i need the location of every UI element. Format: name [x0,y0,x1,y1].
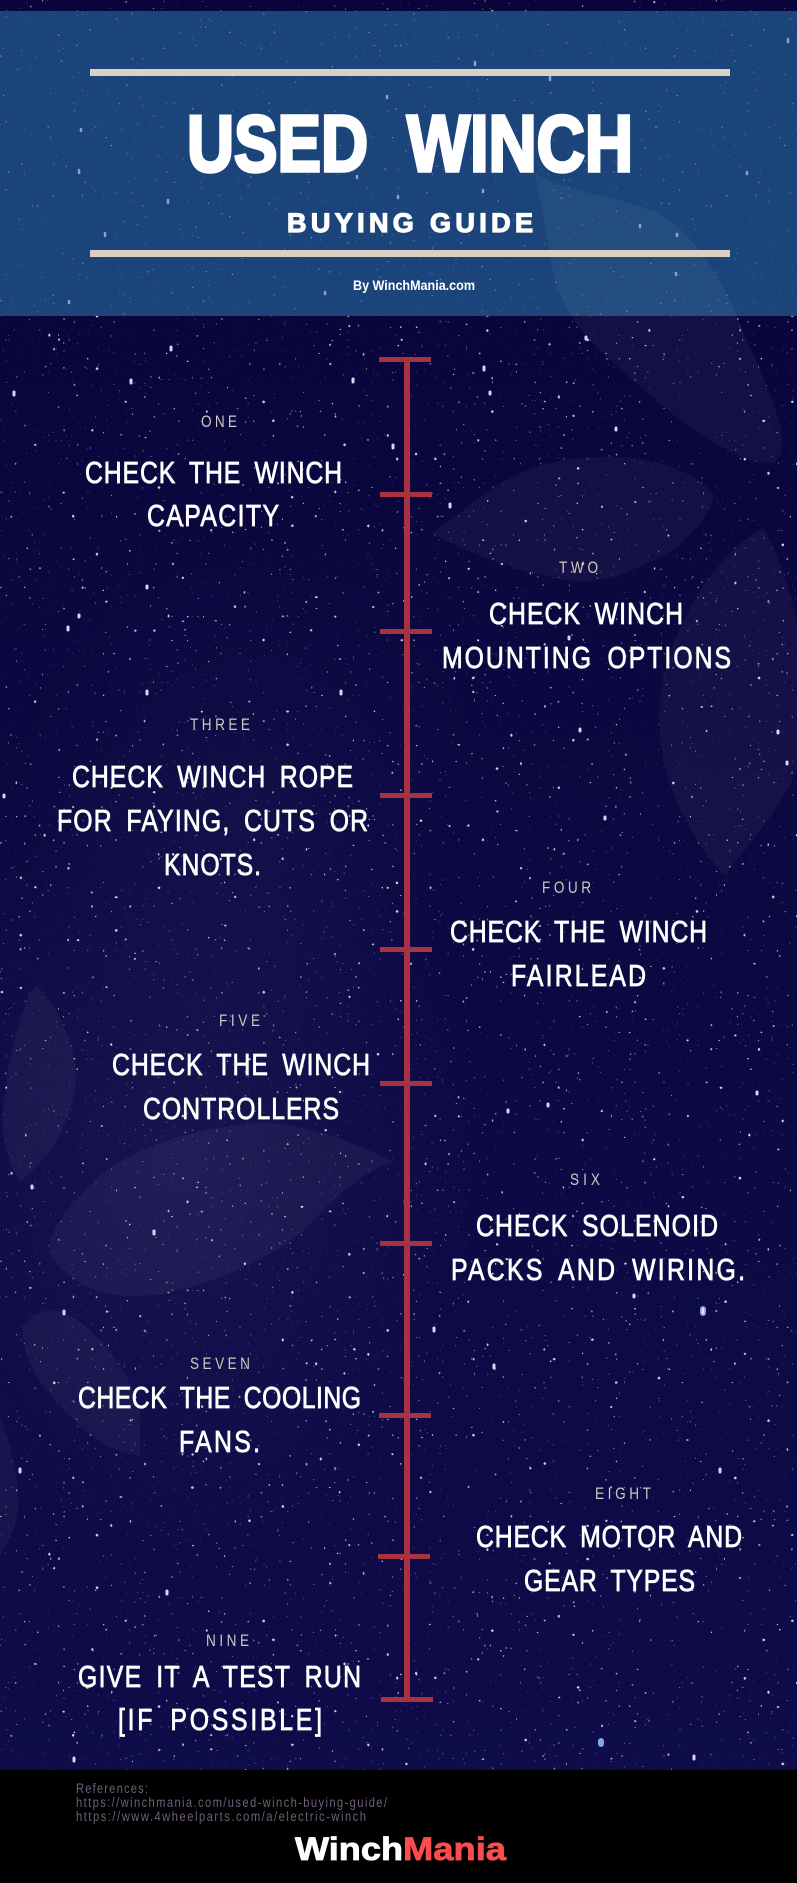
step seven: FANS. [179,1424,260,1459]
logo: Winch [295,1831,403,1867]
step six: PACKS AND WIRING. [451,1252,745,1287]
logo: Mania [403,1831,506,1867]
step six [451,1171,745,1287]
step two: MOUNTING OPTIONS [442,640,731,675]
step eight [476,1485,742,1598]
step one: CHECK THE WINCH [85,455,342,490]
step eight: EIGHT [595,1485,652,1503]
timeline [378,357,433,1702]
step five: CONTROLLERS [143,1091,339,1126]
subtitle: BUYING GUIDE [287,208,533,238]
step three: FOR FAYING, CUTS OR [57,803,368,838]
step one [85,413,342,533]
title: USED [187,99,368,188]
step seven [78,1355,361,1459]
title [187,99,633,188]
step six: CHECK SOLENOID [476,1208,718,1243]
step four: FOUR [542,879,591,897]
step nine: [IF POSSIBLE] [118,1702,322,1737]
step one: CAPACITY [147,498,279,533]
step one: ONE [201,413,237,431]
title: WINCH [407,99,633,188]
references: https://winchmania.com/used-winch-buying-guide/ [76,1795,387,1810]
step two: TWO [559,559,598,577]
references: References: [76,1781,148,1796]
step five: CHECK THE WINCH [112,1047,370,1082]
step five: FIVE [219,1012,260,1030]
step nine: GIVE IT A TEST RUN [78,1659,361,1694]
byline: By WinchMania.com [353,277,475,293]
step two: CHECK WINCH [489,596,683,631]
step two [442,559,731,675]
step five [112,1012,370,1126]
footer band [0,1770,797,1883]
references [76,1781,387,1824]
references: https://www.4wheelparts.com/a/electric-winch [76,1809,366,1824]
logo [295,1831,506,1867]
step four [450,879,707,993]
step seven: SEVEN [190,1355,250,1373]
step four: FAIRLEAD [511,958,646,993]
header band [0,11,797,316]
step eight: CHECK MOTOR AND [476,1519,742,1554]
step three: CHECK WINCH ROPE [72,759,353,794]
step nine [78,1632,361,1737]
step six: SIX [570,1171,600,1189]
header rule bottom [90,250,730,257]
header rule top [90,69,730,76]
step three: KNOTS. [164,847,261,882]
step nine: NINE [206,1632,249,1650]
decorative leaf shapes [0,172,797,1555]
step eight: GEAR TYPES [524,1563,695,1598]
step four: CHECK THE WINCH [450,914,707,949]
step three: THREE [190,716,250,734]
step seven: CHECK THE COOLING [78,1380,361,1415]
step three [57,716,368,882]
